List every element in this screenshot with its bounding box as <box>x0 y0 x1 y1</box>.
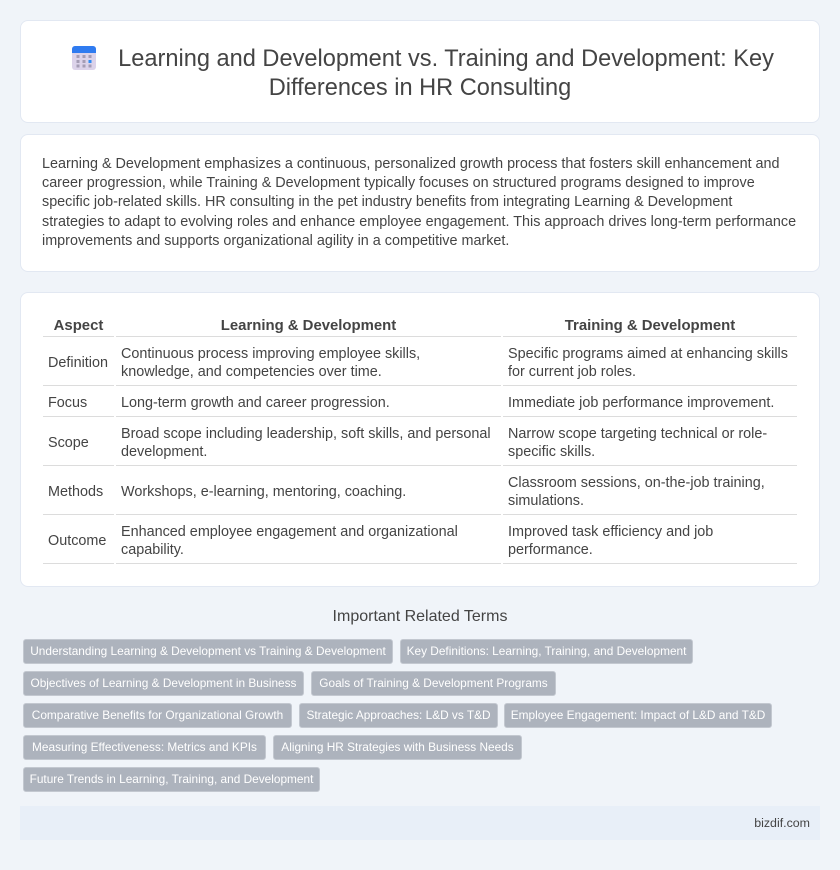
Focus: L&D: Long-term growth and career progression. <box>121 395 390 411</box>
panel: intro paragraph <box>20 134 820 272</box>
tag <box>23 703 292 728</box>
tag: Aligning HR Strategies with Business Needs <box>281 740 514 754</box>
Methods: T&D <box>508 475 765 509</box>
title: Learning and Development vs. Training and Development: Key <box>118 46 774 72</box>
tags: related terms <box>23 639 772 792</box>
header panel <box>20 20 820 123</box>
Scope: T&D: specific skills. <box>508 444 595 460</box>
tag: Future Trends in Learning, Training, and Development <box>30 772 313 786</box>
Outcome: L&D <box>121 524 458 558</box>
tag: Objectives of Learning & Development in Business <box>30 676 296 690</box>
tag <box>23 735 266 760</box>
Scope: T&D <box>508 426 767 460</box>
Methods: T&D: simulations. <box>508 493 584 509</box>
tag <box>273 735 522 760</box>
intro text: Learning & Development emphasizes a continuous, personalized growth process that fosters skill enhancement and <box>42 156 780 172</box>
table: comparison <box>43 318 797 564</box>
intro text <box>42 156 796 249</box>
footer text: bizdif.com <box>754 816 810 830</box>
Scope: L&D: development. <box>121 444 207 460</box>
Outcome: T&D: performance. <box>508 542 593 558</box>
row: Focus: Focus <box>48 395 87 411</box>
intro text: career progression, while Training & Development typically focuses on structured programs designed to improve <box>42 175 755 191</box>
Scope: L&D <box>121 426 491 460</box>
intro text: strategies to adapt to evolving roles and enhance employee engagement. This approach drives long-term performance <box>42 214 796 230</box>
Methods: L&D: Workshops, e-learning, mentoring, coaching. <box>121 484 406 500</box>
Definition: L&D <box>121 346 420 380</box>
tag <box>400 639 693 664</box>
Outcome: L&D: Enhanced employee engagement and organizational <box>121 524 458 540</box>
heading: related terms: Important Related Terms <box>333 608 507 625</box>
Definition: L&D: Continuous process improving employee skills, <box>121 346 420 362</box>
intro text: specific job-related skills. HR consulting in the pet industry benefits from integrating Learning & Development <box>42 194 732 210</box>
Outcome: L&D: capability. <box>121 542 184 558</box>
tag <box>299 703 498 728</box>
tag: Goals of Training & Development Programs <box>319 676 548 690</box>
header: Training & Development: Training & Development <box>565 318 735 334</box>
Scope: T&D: Narrow scope targeting technical or role- <box>508 426 767 442</box>
Definition: T&D: Specific programs aimed at enhancing skills <box>508 346 788 362</box>
tag: Strategic Approaches: L&D vs T&D <box>306 708 491 722</box>
panel: comparison table <box>20 292 820 587</box>
row: Scope: Scope <box>48 435 89 451</box>
Scope: L&D: Broad scope including leadership, soft skills, and personal <box>121 426 491 442</box>
Focus: T&D: Immediate job performance improvement. <box>508 395 774 411</box>
tag <box>23 671 304 696</box>
tag: Understanding Learning & Development vs Training & Development <box>30 644 386 658</box>
Definition: T&D: for current job roles. <box>508 364 636 380</box>
tag: Key Definitions: Learning, Training, and Development <box>407 644 686 658</box>
tag <box>504 703 772 728</box>
tag: Comparative Benefits for Organizational Growth <box>32 708 283 722</box>
tag: Employee Engagement: Impact of L&D and T&D <box>511 708 765 722</box>
Outcome: T&D <box>508 524 713 558</box>
tag <box>23 639 393 664</box>
row: Outcome: Outcome <box>48 533 106 549</box>
intro text: improvements and supports organizational agility in a competitive market. <box>42 233 509 249</box>
tag: Measuring Effectiveness: Metrics and KPIs <box>32 740 257 754</box>
title: Differences in HR Consulting <box>269 75 571 101</box>
tag <box>311 671 556 696</box>
tag <box>23 767 320 792</box>
Definition: L&D: knowledge, and competencies over time. <box>121 364 382 380</box>
footer bar <box>20 806 820 840</box>
Outcome: T&D: Improved task efficiency and job <box>508 524 713 540</box>
row: Definition: Definition <box>48 355 108 371</box>
title <box>118 46 774 101</box>
Methods: T&D: Classroom sessions, on-the-job training, <box>508 475 765 491</box>
icon: calendar <box>72 46 96 70</box>
header: Aspect: Aspect <box>54 318 103 334</box>
Definition: T&D <box>508 346 788 380</box>
row: Methods: Methods <box>48 484 103 500</box>
header: Learning & Development: Learning & Development <box>221 318 396 334</box>
